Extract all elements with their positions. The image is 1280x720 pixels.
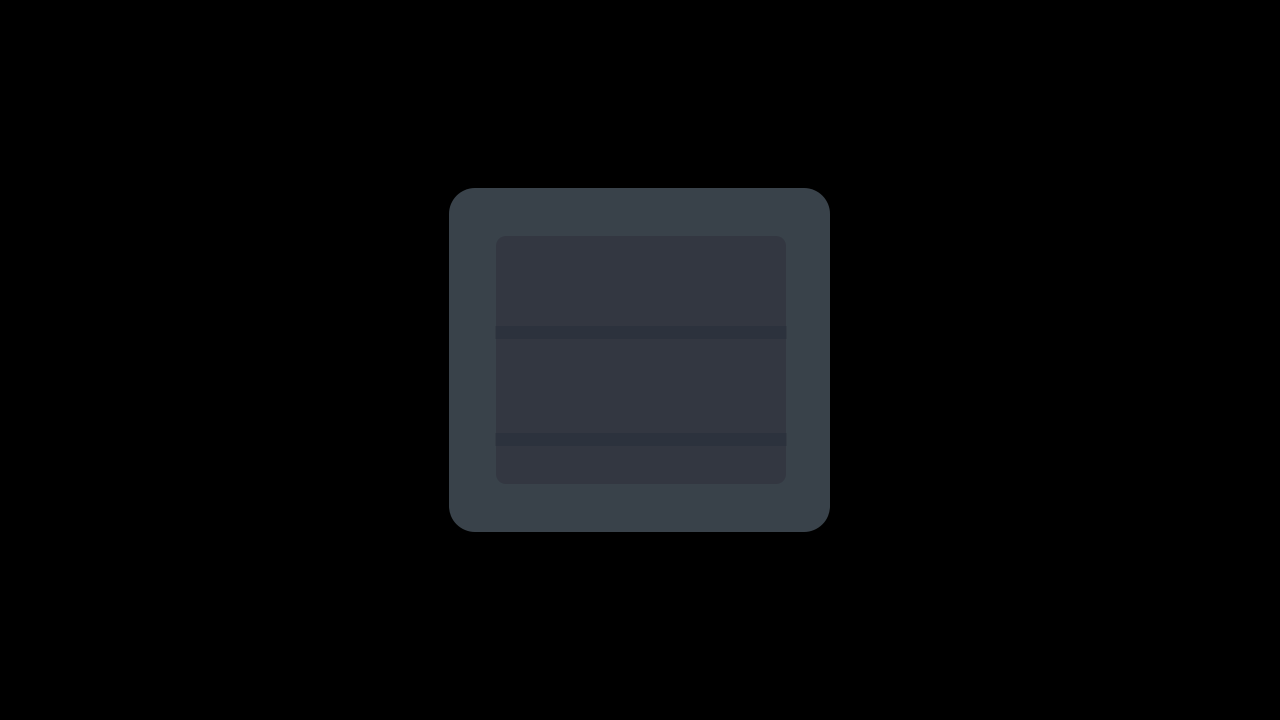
upper horizontal band bbox=[496, 326, 786, 339]
panel: outer rounded card bbox=[449, 188, 830, 532]
lower horizontal band bbox=[496, 433, 786, 446]
panel: inner rounded panel bbox=[496, 236, 786, 484]
